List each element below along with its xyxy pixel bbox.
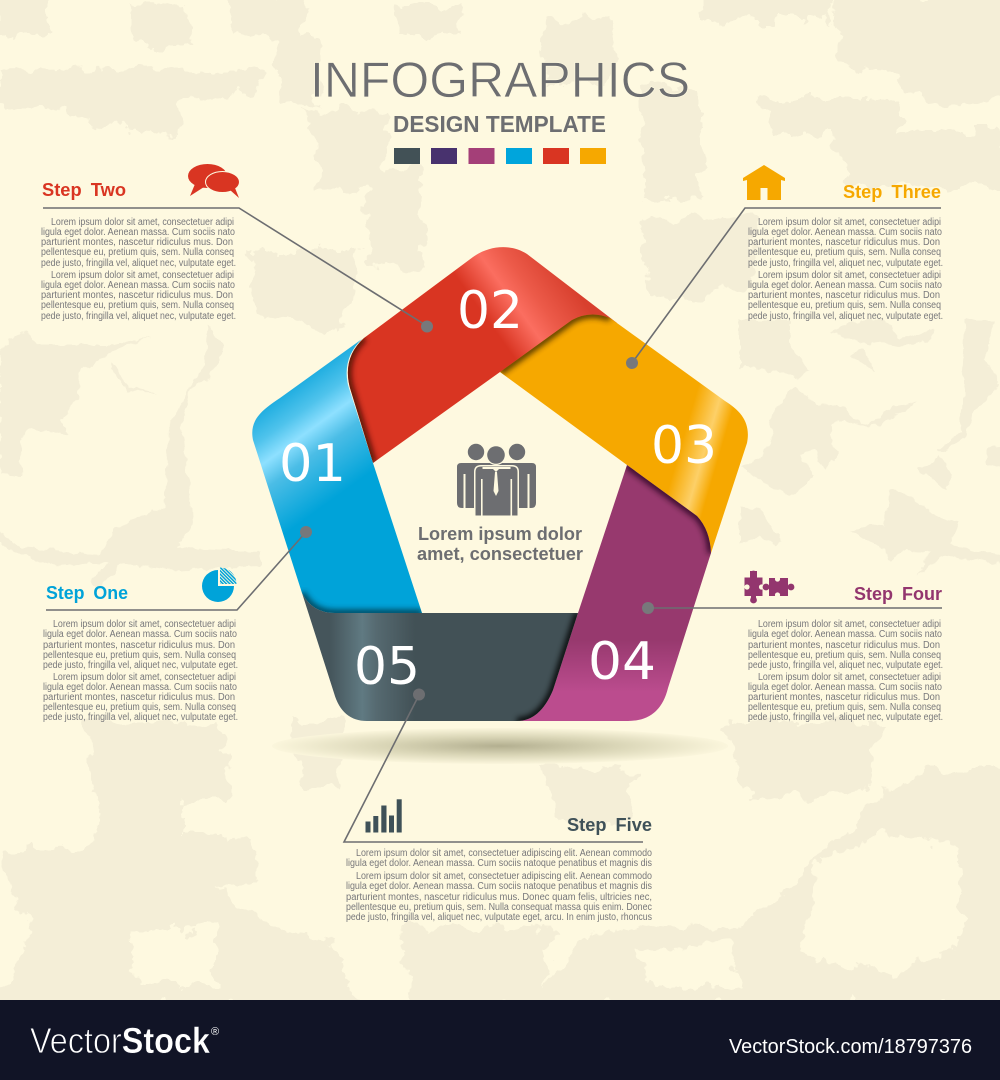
subtitle: DESIGN TEMPLATE [393, 111, 606, 137]
step three body text: ligula eget dolor. Aenean massa. Cum sociis nato [748, 227, 942, 238]
step four body text [748, 619, 943, 723]
panel: step two [41, 164, 433, 332]
step four heading: Step Four [854, 584, 942, 604]
step five marker dot [413, 688, 425, 700]
step four marker dot [642, 602, 654, 614]
step five heading: Step Five [567, 815, 652, 835]
step three body text [748, 217, 943, 322]
step two body text: ligula eget dolor. Aenean massa. Cum sociis nato [41, 227, 235, 238]
step one body text: parturient montes, nascetur ridiculus mus. Don [43, 692, 235, 703]
centre text: Lorem ipsum dolor [418, 524, 582, 544]
step one body text [43, 619, 238, 723]
step three leader [632, 208, 941, 363]
step five leader [344, 695, 643, 842]
step four leader [648, 607, 942, 609]
pentagon diagram [252, 247, 748, 721]
band 04 purple [517, 465, 711, 721]
step four body text: pellentesque eu, pretium quis, sem. Nulla conseq [748, 702, 941, 713]
step one body text: pede justo, fringilla vel, aliquet nec, vulputate eget. [43, 712, 238, 723]
ground shadow [272, 728, 728, 764]
band 05 dark [302, 593, 578, 721]
step one marker dot [300, 526, 312, 538]
step one body text: pede justo, fringilla vel, aliquet nec, vulputate eget. [43, 660, 238, 671]
step three body text: pellentesque eu, pretium quis, sem. Nulla conseq [748, 247, 941, 258]
number 01: 01 [279, 434, 346, 494]
step four body text: Lorem ipsum dolor sit amet, consectetuer adipi [758, 619, 941, 630]
step two leader [43, 208, 427, 326]
icon: bar chart [366, 799, 402, 832]
band 02 red [348, 247, 617, 463]
step three marker dot [626, 357, 638, 369]
step four body text: pede justo, fringilla vel, aliquet nec, vulputate eget. [748, 712, 943, 723]
step one body text: parturient montes, nascetur ridiculus mus. Don [43, 640, 235, 651]
band 03 yellow [500, 314, 748, 553]
step five body text: ligula eget dolor. Aenean massa. Cum sociis natoque penatibus et magnis dis [346, 858, 652, 869]
step four body text: pellentesque eu, pretium quis, sem. Nulla conseq [748, 650, 941, 661]
icon: house [743, 165, 785, 200]
step three body text: ligula eget dolor. Aenean massa. Cum sociis nato [748, 280, 942, 291]
step one body text: Lorem ipsum dolor sit amet, consectetuer adipi [53, 672, 236, 683]
step three body text: pede justo, fringilla vel, aliquet nec, vulputate eget. [748, 311, 943, 322]
step two body text: Lorem ipsum dolor sit amet, consectetuer adipi [51, 217, 234, 228]
step two body text: pede justo, fringilla vel, aliquet nec, vulputate eget. [41, 311, 236, 322]
step five body text: Lorem ipsum dolor sit amet, consectetuer adipiscing elit. Aenean commodo [356, 848, 652, 859]
step one body text: pellentesque eu, pretium quis, sem. Nulla conseq [43, 702, 236, 713]
step two body text: pede justo, fringilla vel, aliquet nec, vulputate eget. [41, 258, 236, 269]
panel: step five [344, 688, 652, 923]
step two body text: pellentesque eu, pretium quis, sem. Nulla conseq [41, 300, 234, 311]
background texture: fine [0, 320, 1000, 590]
footer bar [0, 1000, 1000, 1080]
step three body text: Lorem ipsum dolor sit amet, consectetuer adipi [758, 270, 941, 281]
step two body text [41, 217, 236, 322]
footer registered mark: ® [211, 1026, 219, 1038]
step two body text: Lorem ipsum dolor sit amet, consectetuer adipi [51, 270, 234, 281]
step three body text: Lorem ipsum dolor sit amet, consectetuer adipi [758, 217, 941, 228]
step five body text: pede justo, fringilla vel, aliquet nec, vulputate eget, arcu. In enim justo, rhoncus [346, 912, 652, 923]
step two heading: Step Two [42, 180, 126, 200]
icon: pie chart [202, 568, 236, 602]
footer url: VectorStock.com/18797376 [729, 1036, 972, 1058]
icon: chat bubbles [188, 164, 240, 198]
step five body text: ligula eget dolor. Aenean massa. Cum sociis natoque penatibus et magnis dis [346, 881, 652, 892]
panel: step three [626, 165, 943, 369]
step one body text: ligula eget dolor. Aenean massa. Cum sociis nato [43, 682, 237, 693]
title: INFOGRAPHICS [310, 52, 690, 108]
step three body text: pede justo, fringilla vel, aliquet nec, vulputate eget. [748, 258, 943, 269]
step two body text: parturient montes, nascetur ridiculus mus. Don [41, 237, 233, 248]
step one body text: ligula eget dolor. Aenean massa. Cum sociis nato [43, 629, 237, 640]
number 02: 02 [457, 281, 523, 341]
step one leader [46, 532, 306, 610]
step three body text: pellentesque eu, pretium quis, sem. Nulla conseq [748, 300, 941, 311]
step five body text: parturient montes, nascetur ridiculus mus. Donec quam felis, ultricies nec, [346, 892, 652, 903]
step two marker dot [421, 320, 433, 332]
number 04: 04 [588, 632, 656, 692]
background light patches [130, 800, 960, 985]
footer logo: VectorStock [30, 1020, 211, 1061]
step four body text: parturient montes, nascetur ridiculus mus. Don [748, 640, 940, 651]
step four body text: pede justo, fringilla vel, aliquet nec, vulputate eget. [748, 660, 943, 671]
step two body text: parturient montes, nascetur ridiculus mus. Don [41, 290, 233, 301]
number 03: 03 [651, 416, 717, 476]
step one body text: pellentesque eu, pretium quis, sem. Nulla conseq [43, 650, 236, 661]
step one body text: Lorem ipsum dolor sit amet, consectetuer adipi [53, 619, 236, 630]
step five body text: pellentesque eu, pretium quis, sem. Nulla consequat massa quis enim. Donec [346, 902, 652, 913]
step five body text: Lorem ipsum dolor sit amet, consectetuer adipiscing elit. Aenean commodo [356, 871, 652, 882]
step three heading: Step Three [843, 182, 941, 202]
step four body text: ligula eget dolor. Aenean massa. Cum sociis nato [748, 629, 942, 640]
step two body text: ligula eget dolor. Aenean massa. Cum sociis nato [41, 280, 235, 291]
step one heading: Step One [46, 583, 128, 603]
centre text: amet, consectetuer [417, 544, 583, 564]
step three body text: parturient montes, nascetur ridiculus mus. Don [748, 290, 940, 301]
band 01 blue [252, 339, 422, 613]
step three body text: parturient montes, nascetur ridiculus mus. Don [748, 237, 940, 248]
panel: step one [43, 526, 312, 723]
step four body text: parturient montes, nascetur ridiculus mus. Don [748, 692, 940, 703]
step five body text [346, 848, 652, 923]
icon: puzzle pieces [744, 571, 794, 603]
colour swatches [394, 148, 606, 164]
panel: step four [642, 571, 943, 723]
step four body text: ligula eget dolor. Aenean massa. Cum sociis nato [748, 682, 942, 693]
number 05: 05 [354, 637, 420, 697]
step two body text: pellentesque eu, pretium quis, sem. Nulla conseq [41, 247, 234, 258]
icon: people [457, 444, 536, 516]
centre text [417, 524, 583, 564]
step four body text: Lorem ipsum dolor sit amet, consectetuer adipi [758, 672, 941, 683]
